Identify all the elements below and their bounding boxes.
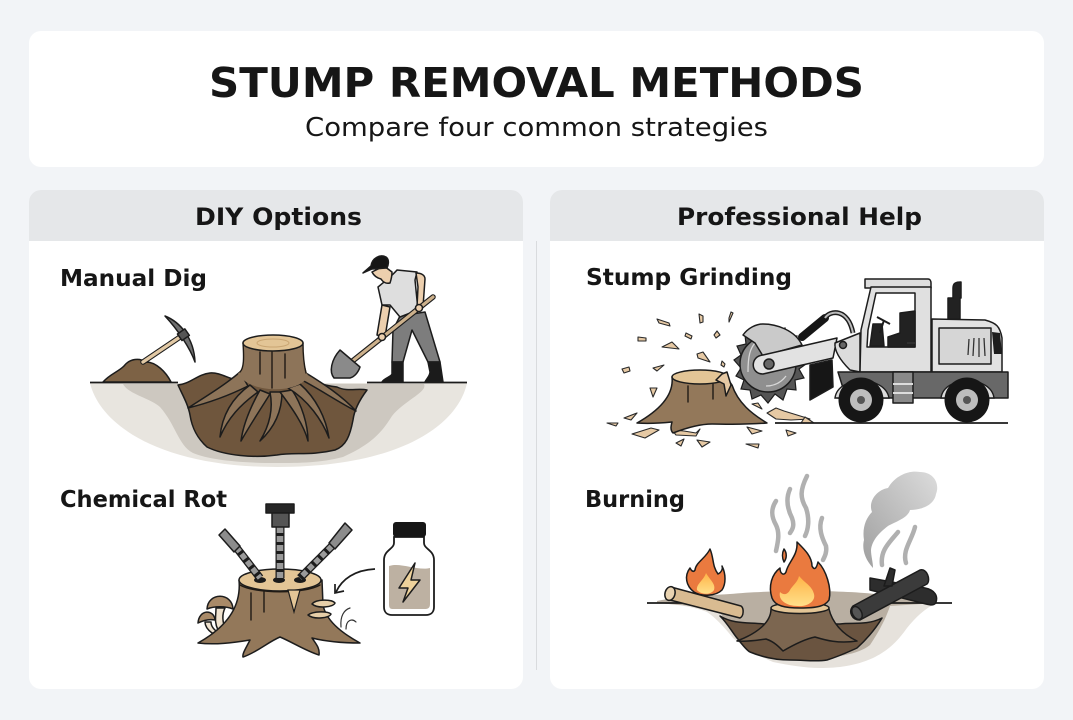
smoke cloud <box>863 472 937 568</box>
wheels <box>835 381 889 398</box>
hose <box>802 313 853 337</box>
pickaxe <box>143 316 195 362</box>
label: chemical rot: Chemical Rot <box>60 487 227 513</box>
exhaust <box>948 282 961 319</box>
cab <box>865 279 931 288</box>
truck <box>835 279 1008 422</box>
illustration: manual dig <box>90 256 467 467</box>
ground bowl <box>657 603 937 668</box>
centre divider <box>536 241 538 670</box>
title card <box>29 31 1044 167</box>
chemical bottle <box>384 522 434 615</box>
shelf fungi <box>308 600 356 629</box>
stump and roots <box>188 335 356 441</box>
illustration: stump grinding <box>607 279 1008 448</box>
worker with shovel <box>331 256 443 382</box>
label: stump grinding: Stump Grinding <box>586 265 792 291</box>
grinder wheel <box>734 324 806 403</box>
chassis <box>838 372 1008 398</box>
label: burning: Burning <box>585 487 685 513</box>
soil pit <box>178 373 367 456</box>
mushrooms <box>198 596 233 633</box>
charred logs <box>850 568 937 621</box>
left flame <box>687 549 725 595</box>
wood chips <box>607 312 814 448</box>
stump <box>198 569 360 657</box>
label: manual dig: Manual Dig <box>60 266 207 292</box>
central steam <box>772 476 826 560</box>
arrow <box>335 569 375 593</box>
stump <box>637 370 767 433</box>
left log <box>663 585 743 618</box>
panel: DIY options <box>29 190 523 689</box>
illustration: chemical rot <box>198 504 434 657</box>
pit soil <box>720 616 882 661</box>
ground line <box>647 602 952 604</box>
grinder arm <box>753 333 860 374</box>
icon: lightning bolt <box>399 563 420 602</box>
central flame <box>770 542 830 608</box>
drill bits <box>219 504 352 578</box>
title: STUMP REMOVAL METHODS <box>209 59 864 107</box>
dirt pile <box>103 359 171 382</box>
ground line <box>775 422 1008 424</box>
heading: professional help: Professional Help <box>677 203 922 231</box>
heading: DIY options: DIY Options <box>195 203 362 231</box>
ground line <box>90 382 467 384</box>
black flap <box>810 360 833 400</box>
engine body <box>932 319 1002 372</box>
subtitle: Compare four common strategies <box>305 113 768 143</box>
illustration: burning <box>647 472 952 668</box>
panel: professional help <box>550 190 1044 689</box>
stump <box>737 602 857 651</box>
